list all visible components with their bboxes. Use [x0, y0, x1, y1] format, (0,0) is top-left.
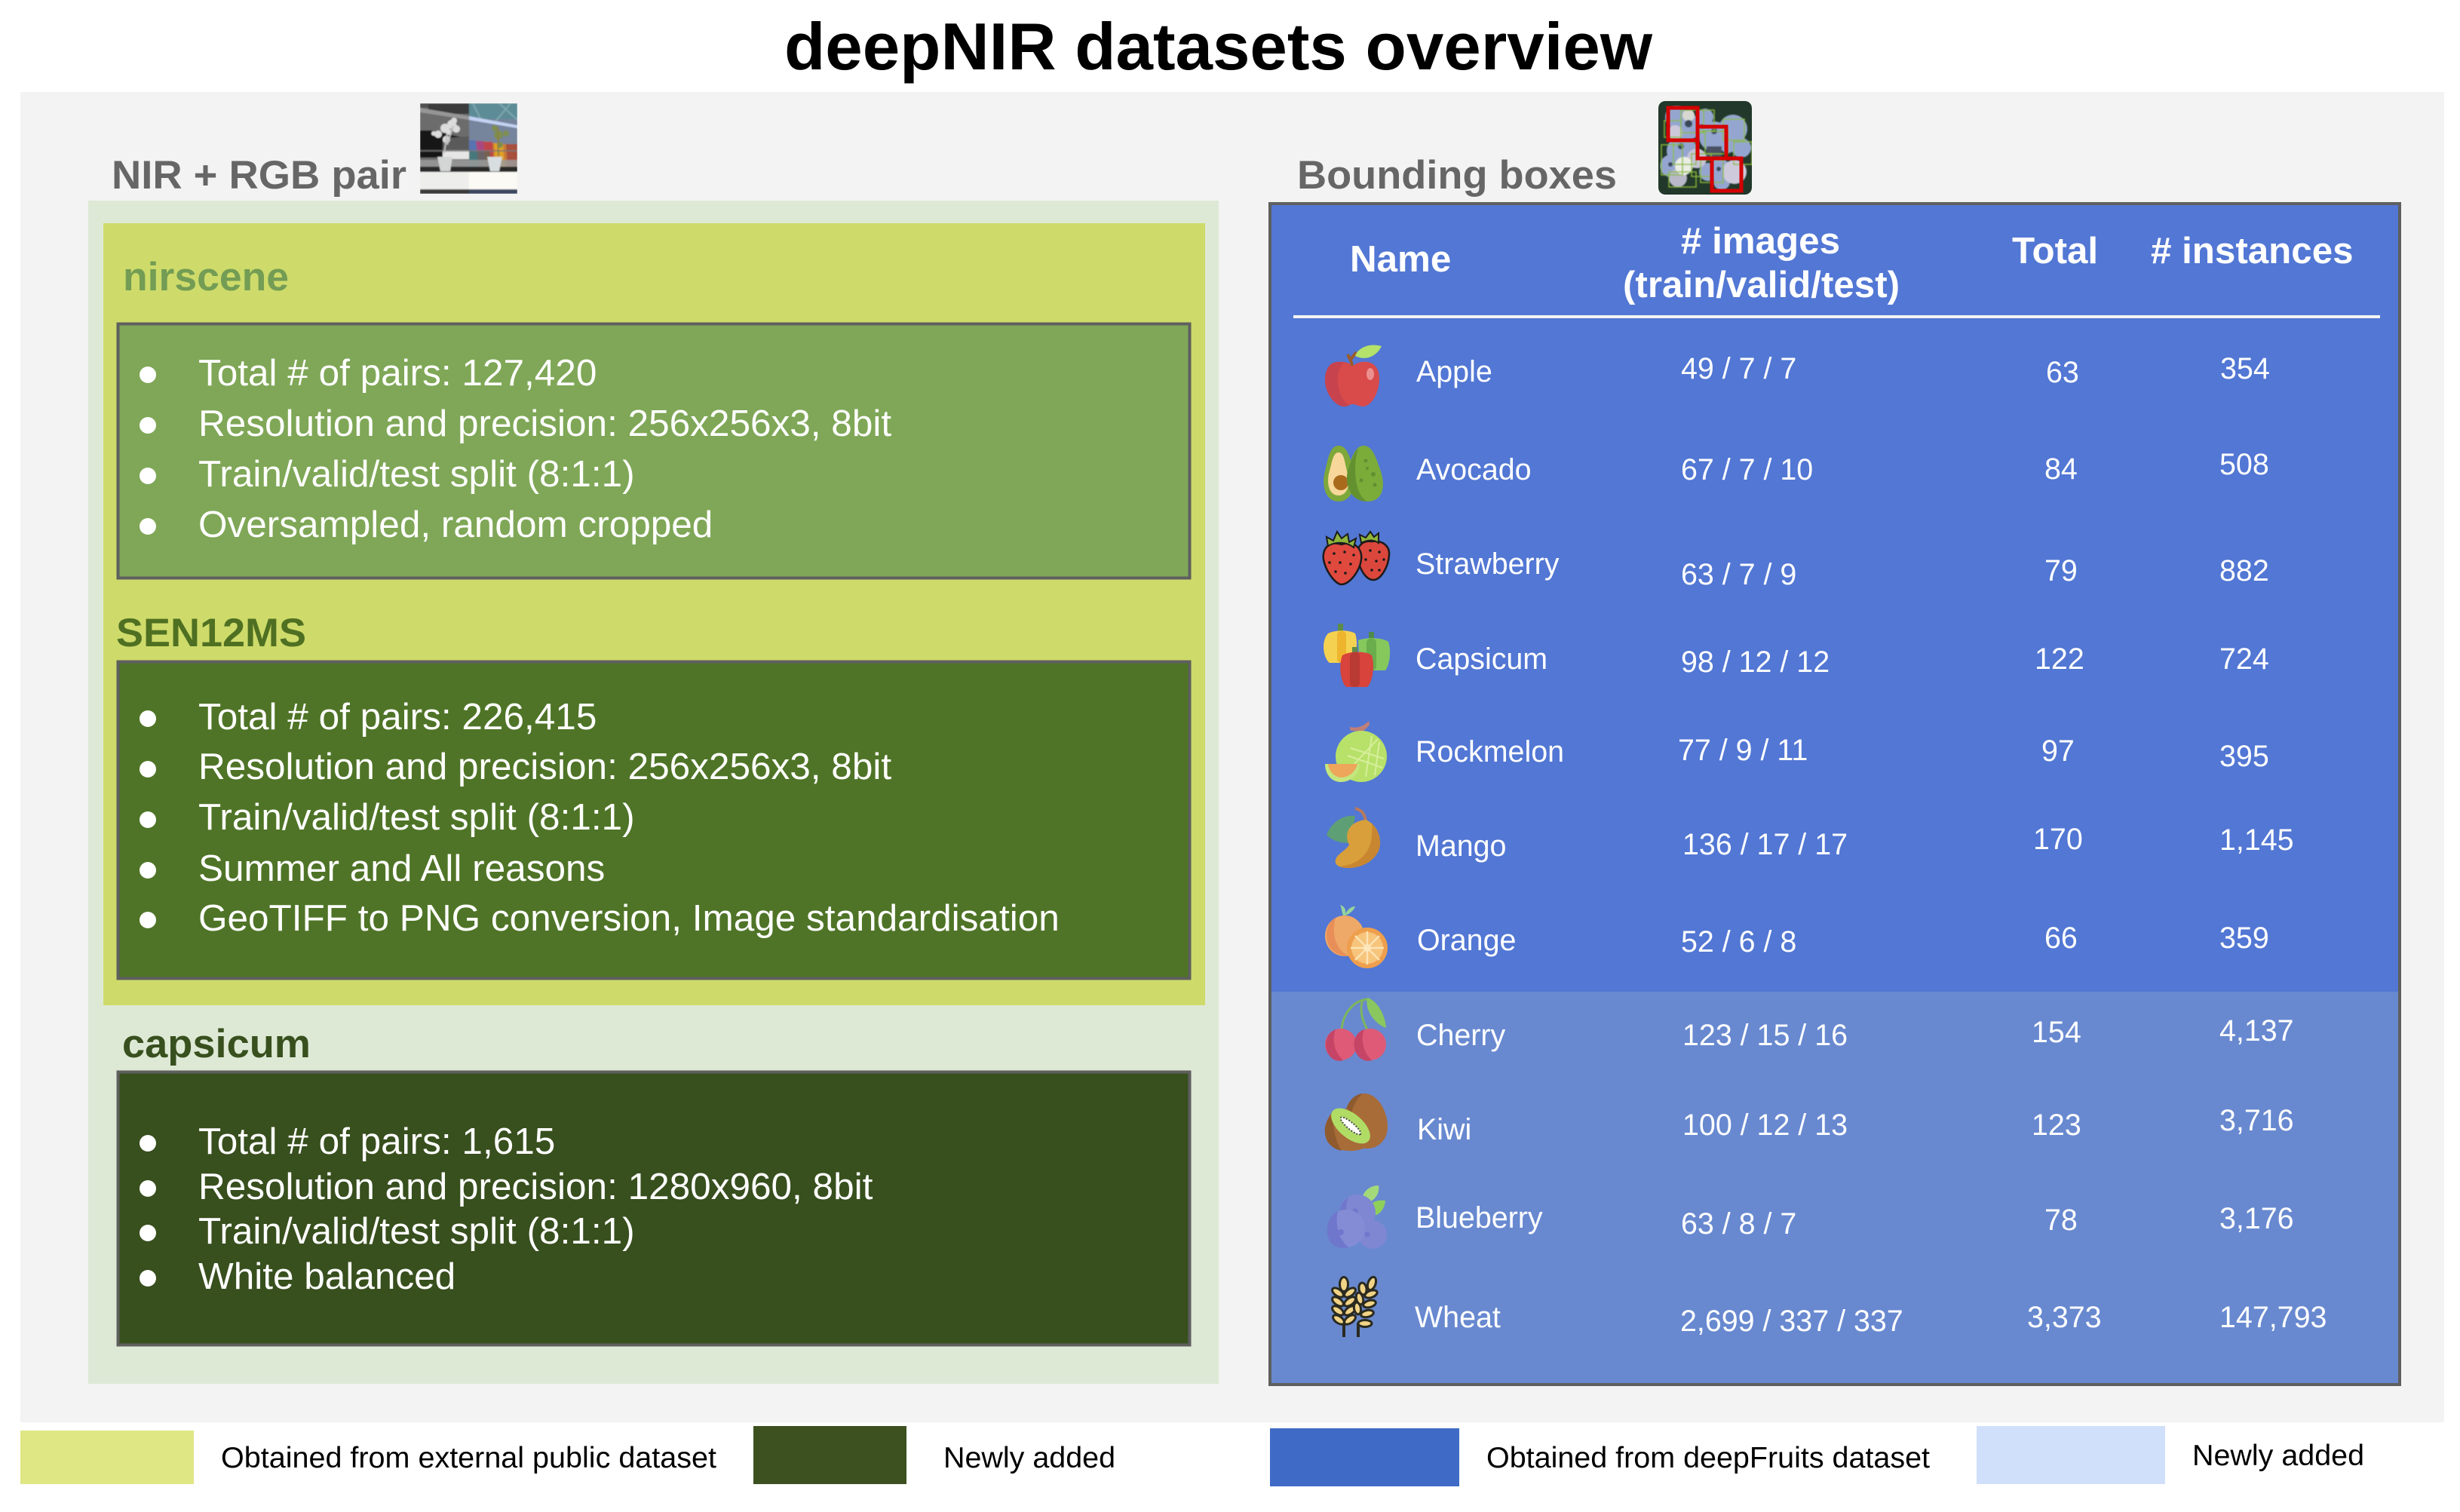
row: Orange — [1325, 905, 2269, 968]
box: capsicum details: White balanced — [198, 1256, 455, 1297]
icon: wheat — [1330, 1276, 1379, 1337]
row: Cherry: 4,137 — [2219, 1014, 2294, 1047]
table header: # instances — [2151, 230, 2354, 271]
row: Rockmelon: 97 — [2041, 735, 2075, 768]
box: capsicum details: Train/valid/test split (8:1:1) — [198, 1210, 635, 1252]
box: nirscene details: Train/valid/test split (8:1:1) — [198, 453, 635, 495]
row: Avocado: 508 — [2219, 448, 2269, 481]
table header: # images — [1681, 220, 1840, 262]
table header: (train/valid/test) — [1623, 264, 1900, 305]
legend: newly added (blue): Newly added — [2192, 1440, 2364, 1472]
panel: NIR + RGB pair — [112, 103, 517, 198]
box: SEN12MS details: Total # of pairs: 226,415 — [198, 696, 597, 738]
row: Avocado: 84 — [2044, 452, 2078, 486]
row: Strawberry — [1324, 532, 2269, 591]
legend: newly added (green) — [753, 1426, 1115, 1484]
row: Orange: 52 / 6 / 8 — [1681, 925, 1796, 958]
row: Capsicum: Capsicum — [1416, 643, 1547, 676]
row: Capsicum — [1324, 624, 2269, 687]
legend: newly added (green): Newly added — [943, 1442, 1115, 1474]
row: Capsicum: 98 / 12 / 12 — [1681, 646, 1830, 679]
icon: strawberry — [1324, 532, 1389, 584]
row: Avocado: Avocado — [1416, 453, 1532, 486]
icon: kiwi — [1325, 1093, 1388, 1151]
row: Mango: Mango — [1416, 830, 1506, 863]
row: Cherry — [1325, 998, 2294, 1061]
box: SEN12MS details: Resolution and precision: 256x256x3, 8bit — [198, 746, 891, 787]
row: Kiwi — [1325, 1093, 2294, 1151]
row: Strawberry: 63 / 7 / 9 — [1681, 558, 1796, 591]
row: Orange: 359 — [2219, 922, 2269, 955]
image: blueberries with bounding boxes — [1658, 101, 1752, 195]
legend: deepFruits dataset — [1270, 1428, 1930, 1486]
heading: nirscene: nirscene — [123, 255, 289, 299]
icon: blueberry — [1327, 1185, 1387, 1249]
heading: Bounding boxes: Bounding boxes — [1297, 153, 1617, 198]
icon: mango — [1327, 808, 1380, 868]
icon: apple — [1325, 345, 1382, 406]
row: Orange: Orange — [1417, 924, 1516, 957]
row: Mango: 1,145 — [2219, 823, 2294, 857]
image: NIR and RGB photo pair — [420, 103, 517, 194]
panel: SEN12MS — [116, 611, 1190, 979]
row: Blueberry: Blueberry — [1416, 1201, 1543, 1234]
row: Blueberry — [1327, 1185, 2294, 1249]
row: Strawberry: 79 — [2044, 554, 2078, 587]
icon: orange — [1325, 905, 1388, 968]
row: Capsicum: 122 — [2035, 643, 2084, 676]
row: Rockmelon — [1325, 721, 2269, 782]
row: Cherry: Cherry — [1416, 1019, 1505, 1052]
row: Capsicum: 724 — [2219, 643, 2269, 676]
row: Wheat: 3,373 — [2027, 1301, 2102, 1334]
heading: capsicum: capsicum — [122, 1022, 311, 1066]
heading: NIR + RGB pair: NIR + RGB pair — [112, 153, 406, 198]
row: Cherry: 123 / 15 / 16 — [1682, 1019, 1848, 1052]
legend: external public dataset: Obtained from external public dataset — [221, 1442, 716, 1474]
row: Blueberry: 3,176 — [2219, 1202, 2294, 1235]
row: Wheat: 2,699 / 337 / 337 — [1680, 1305, 1903, 1338]
row: Kiwi: 123 — [2032, 1109, 2081, 1142]
box: capsicum details: Total # of pairs: 1,615 — [198, 1121, 555, 1162]
row: Apple: 49 / 7 / 7 — [1681, 352, 1796, 385]
row: Orange: 66 — [2044, 922, 2078, 955]
panel: nirscene — [118, 255, 1190, 578]
title: deepNIR datasets overview — [784, 9, 1653, 84]
row: Mango: 170 — [2033, 823, 2083, 856]
row: Rockmelon: 395 — [2219, 740, 2269, 773]
table: bounding box datasets — [1270, 204, 2400, 1385]
box: capsicum details: Resolution and precision: 1280x960, 8bit — [198, 1166, 873, 1207]
row: Strawberry: 882 — [2219, 554, 2269, 587]
row: Wheat: Wheat — [1415, 1301, 1501, 1334]
legend: deepFruits dataset: Obtained from deepFruits dataset — [1486, 1442, 1930, 1474]
row: Apple: 63 — [2046, 356, 2079, 389]
row: Cherry: 154 — [2032, 1016, 2081, 1049]
row: Wheat: 147,793 — [2219, 1301, 2327, 1334]
legend: external public dataset — [20, 1431, 716, 1484]
box: capsicum details — [118, 1072, 1190, 1345]
row: Avocado — [1324, 446, 2269, 501]
row: Blueberry: 63 / 8 / 7 — [1681, 1207, 1796, 1241]
box: nirscene details: Total # of pairs: 127,420 — [198, 352, 597, 394]
box: nirscene details: Resolution and precision: 256x256x3, 8bit — [198, 403, 891, 444]
row: Apple: 354 — [2220, 352, 2270, 385]
icon: cherry — [1325, 998, 1386, 1061]
row: Strawberry: Strawberry — [1416, 547, 1560, 581]
box: SEN12MS details — [118, 662, 1190, 979]
row: Rockmelon: Rockmelon — [1416, 735, 1564, 768]
table header — [1293, 220, 2380, 318]
row: Mango — [1327, 808, 2294, 868]
row: Kiwi: 100 / 12 / 13 — [1682, 1109, 1848, 1142]
icon: avocado — [1324, 446, 1383, 501]
panel: green dataset container — [88, 201, 1219, 1384]
row: Avocado: 67 / 7 / 10 — [1681, 453, 1813, 486]
legend: newly added (blue) — [1977, 1426, 2364, 1484]
panel: external datasets — [103, 223, 1205, 1005]
heading: SEN12MS: SEN12MS — [116, 611, 306, 655]
row: Kiwi: 3,716 — [2219, 1104, 2294, 1137]
row: Mango: 136 / 17 / 17 — [1682, 828, 1848, 861]
icon: rockmelon — [1325, 721, 1387, 782]
table header: Name — [1350, 238, 1451, 280]
row: Wheat — [1330, 1276, 2327, 1338]
row: Kiwi: Kiwi — [1417, 1113, 1471, 1146]
row: Rockmelon: 77 / 9 / 11 — [1678, 734, 1808, 767]
row: Blueberry: 78 — [2044, 1204, 2078, 1237]
box: SEN12MS details: GeoTIFF to PNG conversion, Image standardisation — [198, 897, 1060, 939]
box: SEN12MS details: Train/valid/test split (8:1:1) — [198, 796, 635, 838]
table header: Total — [2012, 230, 2098, 271]
row: Apple — [1325, 345, 2270, 406]
box: SEN12MS details: Summer and All reasons — [198, 848, 605, 889]
panel: capsicum — [118, 1022, 1190, 1345]
icon: capsicum — [1324, 624, 1390, 687]
box: nirscene details — [118, 324, 1190, 578]
row: Apple: Apple — [1416, 355, 1492, 388]
box: nirscene details: Oversampled, random cropped — [198, 504, 713, 545]
